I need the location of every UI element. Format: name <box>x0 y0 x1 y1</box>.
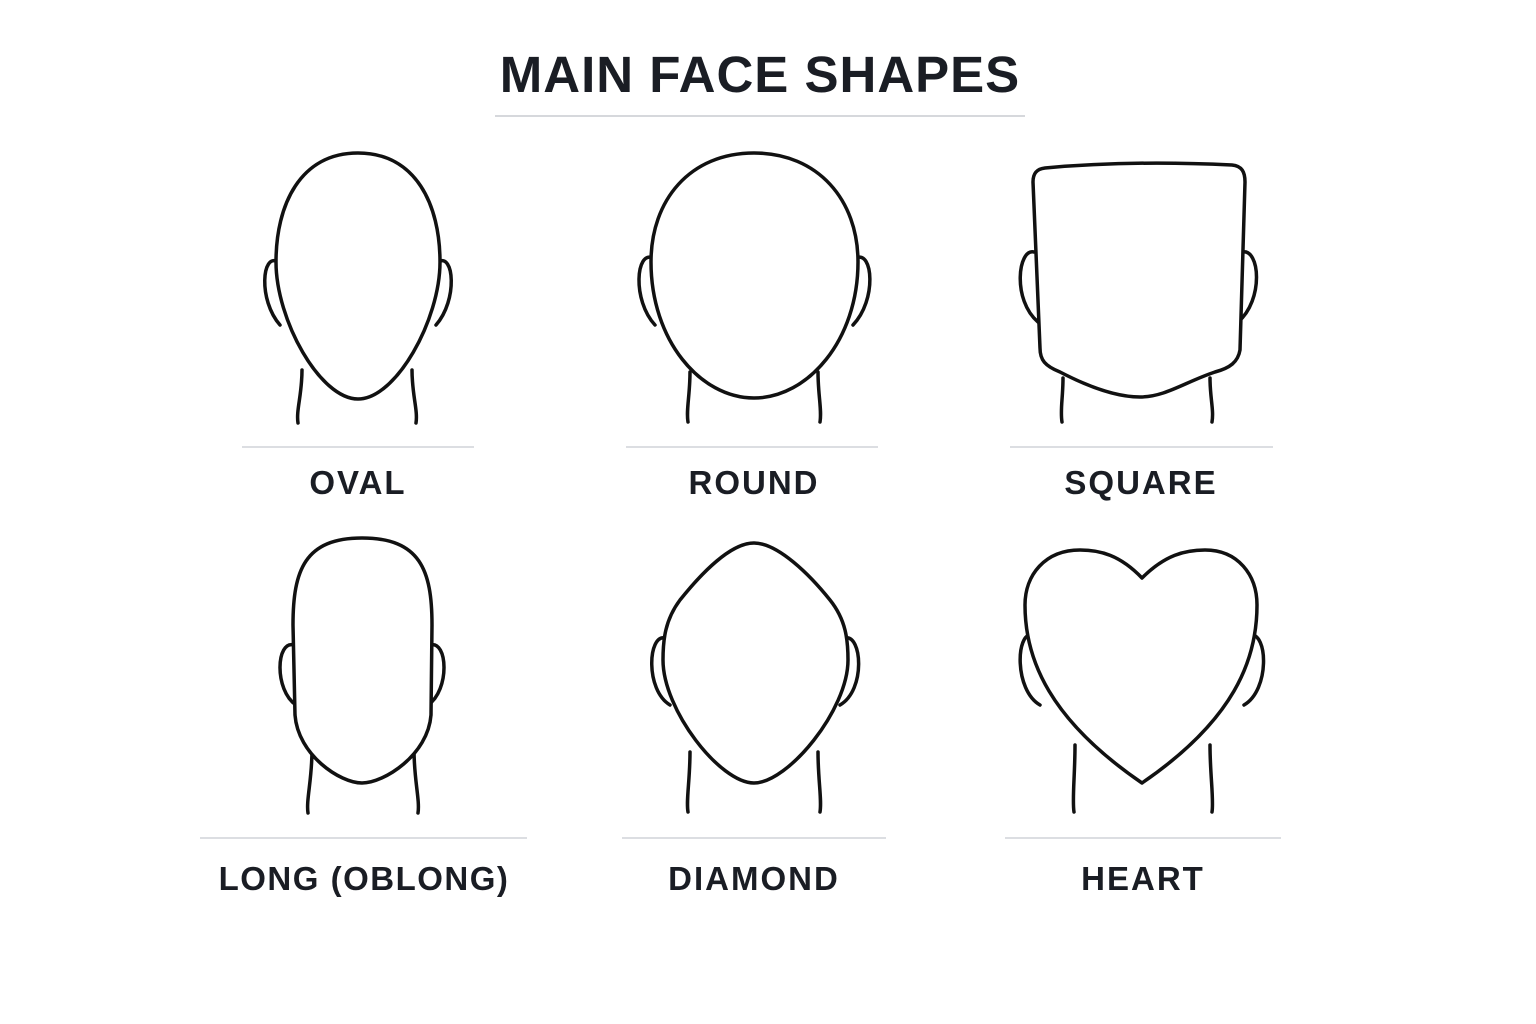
label: long (oblong): LONG (OBLONG) <box>219 860 509 897</box>
label: square: SQUARE <box>1064 464 1218 501</box>
face: diamond <box>652 543 859 812</box>
title: MAIN FACE SHAPES <box>500 46 1020 103</box>
face: heart <box>1020 550 1264 812</box>
label: heart: HEART <box>1081 860 1205 897</box>
face: long (oblong) <box>280 538 444 813</box>
label: round: ROUND <box>688 464 820 501</box>
face: oval <box>265 153 451 423</box>
label: oval: OVAL <box>309 464 407 501</box>
face: round <box>639 153 870 422</box>
face: square <box>1020 163 1256 422</box>
label: diamond: DIAMOND <box>668 860 840 897</box>
